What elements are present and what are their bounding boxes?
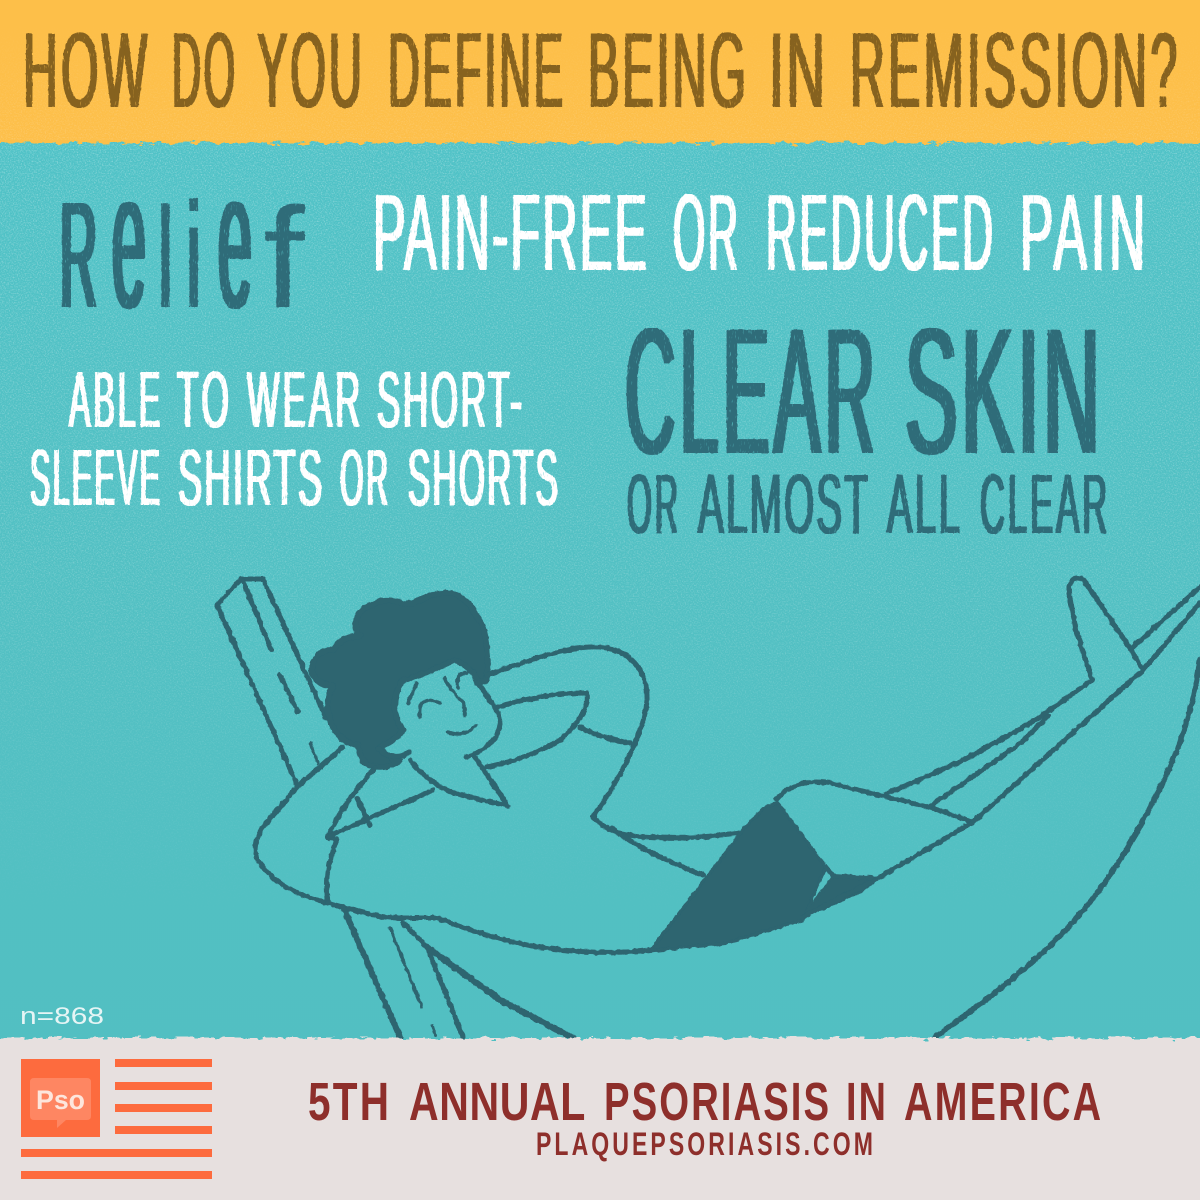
title [23,10,1177,131]
answer: able to wear short-sleeve shirts or shorts: SLEEVE [30,432,160,522]
title: YOU [257,11,362,130]
footer url: PLAQUEPSORIASIS.COM [536,1126,873,1162]
clear skin [625,291,1100,492]
footer title: IN [846,1071,886,1132]
raised leg and foot [826,578,1143,878]
answer: able to wear short-sleeve shirts or shorts: TO [177,356,229,445]
answer: relief: R [60,170,97,339]
answer: relief [60,130,305,349]
sample size note: n=868 [20,1003,104,1030]
hammock ropes [343,907,573,1038]
answer: able to wear short-sleeve shirts or shorts: WEAR [247,356,360,445]
logo: Pso article icon [21,1059,212,1179]
answer: pain-free or reduced pain: OR [673,172,738,294]
footer title: 5TH [308,1072,389,1132]
or almost all clear: ALMOST [698,457,868,551]
footer title: PSORIASIS [604,1072,829,1132]
answer: relief: i [188,172,199,339]
or almost all clear: CLEAR [980,457,1107,551]
hammock edges [803,587,1200,1037]
answer: able to wear short-sleeve shirts or shorts [30,355,558,523]
title: BEING [588,10,746,130]
answer: able to wear short-sleeve shirts or shorts: OR [340,432,388,522]
answer: able to wear short-sleeve shirts or shorts: SHIRTS [178,434,322,523]
title: DO [172,12,235,131]
answer: pain-free or reduced pain: PAIN [1020,171,1145,293]
clear skin: SKIN [905,292,1100,492]
title: HOW [23,10,148,130]
answer: pain-free or reduced pain: REDUCED [766,171,993,294]
raised right arm [487,647,647,817]
answer: able to wear short-sleeve shirts or shorts: SHORTS [408,433,558,522]
face and neck [378,673,508,806]
shorts far leg [803,877,879,917]
torso and thigh [328,782,973,952]
shorts [650,803,826,951]
footer title: AMERICA [904,1072,1101,1133]
title band [0,0,1200,143]
answer: pain-free or reduced pain [373,171,1145,294]
answer: pain-free or reduced pain: PAIN-FREE [373,172,647,293]
answer: relief: e [112,130,146,349]
or almost all clear: ALL [887,457,960,551]
answer: able to wear short-sleeve shirts or shorts: SHORT- [377,356,522,445]
logo text: Pso [36,1085,85,1115]
clear skin: CLEAR [625,291,875,491]
title: REMISSION? [850,10,1177,130]
raised left arm [256,747,433,903]
logo square [21,1059,100,1137]
answer: able to wear short-sleeve shirts or shorts: ABLE [69,355,160,444]
tree post [217,579,326,785]
footer title: ANNUAL [409,1073,585,1132]
article lines [21,1059,212,1179]
footer title [308,1071,1101,1133]
or almost all clear: OR [627,458,678,552]
title: DEFINE [388,11,563,131]
answer: clear skin or almost all clear [625,291,1107,552]
answer: relief: f [263,178,305,338]
hair [312,593,488,767]
footer band [0,1038,1200,1200]
title: IN [769,10,825,130]
answer: relief: e [218,130,252,349]
speech bubble [30,1078,91,1128]
or almost all clear [627,457,1107,552]
illustration: man relaxing in hammock [217,578,1200,1038]
answer: relief: l [160,177,171,338]
